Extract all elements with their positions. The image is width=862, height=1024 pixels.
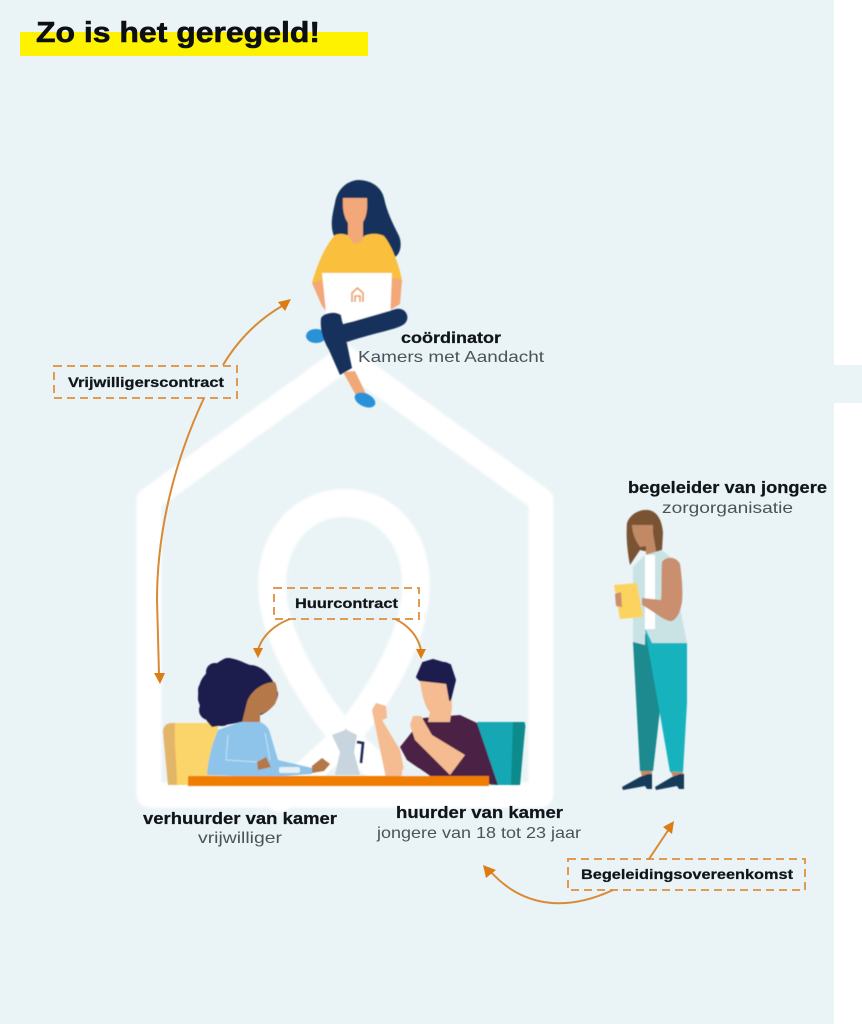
hair xyxy=(417,660,455,700)
illustration: landlord and tenant at table xyxy=(163,658,525,786)
laptop xyxy=(322,273,392,322)
pants xyxy=(633,629,687,772)
contract label: Huurcontract: Huurcontract xyxy=(295,595,398,611)
hair xyxy=(332,180,401,257)
label: landlord: vrijwilliger xyxy=(198,830,283,847)
label: tenant: huurder van kamer xyxy=(396,803,563,822)
arrow: to landlord xyxy=(154,398,204,684)
label: counsellor xyxy=(628,478,827,517)
contract label: Begeleidingsovereenkomst xyxy=(568,859,805,890)
neck and face xyxy=(343,198,367,246)
title: Zo is het geregeld! xyxy=(36,17,320,49)
title xyxy=(20,17,368,56)
blue top xyxy=(207,722,312,777)
ankles xyxy=(640,768,683,777)
label: counsellor: begeleider van jongere xyxy=(628,478,827,497)
hands xyxy=(257,757,330,773)
contract label: Vrijwilligerscontract xyxy=(54,366,237,398)
clipboard xyxy=(614,583,643,619)
illustration: counsellor xyxy=(614,510,687,790)
arrow: to coordinator xyxy=(223,299,291,365)
contract label: Huurcontract xyxy=(274,588,419,619)
cup xyxy=(279,767,300,773)
arrow: to tenant from rental contract xyxy=(395,619,426,659)
label: coordinator: coördinator xyxy=(401,330,501,347)
coffee pot xyxy=(332,728,363,775)
hair xyxy=(198,658,278,727)
label: tenant xyxy=(376,803,582,842)
face and neck xyxy=(242,682,277,724)
label: landlord xyxy=(143,809,337,847)
sweater xyxy=(312,234,402,300)
shirt xyxy=(645,555,655,629)
back shoe xyxy=(306,329,326,343)
contract label: Vrijwilligerscontract: Vrijwilligerscontract xyxy=(68,374,224,390)
label: landlord: verhuurder van kamer xyxy=(143,809,337,828)
shoes xyxy=(622,774,684,790)
shirt xyxy=(400,715,498,785)
arms xyxy=(312,278,402,312)
arrow: to counsellor xyxy=(649,821,674,859)
illustration: coordinator with laptop xyxy=(306,180,407,411)
cup xyxy=(402,769,432,777)
landlord xyxy=(198,658,330,777)
teal chair xyxy=(477,722,525,785)
arm and hands xyxy=(615,558,682,621)
raised arm xyxy=(372,703,405,778)
lower leg and front shoe xyxy=(343,371,378,411)
face and neck xyxy=(632,525,657,556)
label: coordinator xyxy=(358,330,545,366)
legs xyxy=(321,309,407,375)
label: counsellor: zorgorganisatie xyxy=(662,500,793,517)
top seam xyxy=(226,733,270,762)
contract label: Begeleidingsovereenkomst: Begeleidingsovereenkomst xyxy=(581,866,793,882)
house and ribbon outline xyxy=(149,358,541,798)
hair xyxy=(627,510,663,565)
forearm xyxy=(410,716,465,775)
label: coordinator: Kamers met Aandacht xyxy=(358,349,545,366)
arrow: to landlord from rental contract xyxy=(253,619,290,658)
vest xyxy=(633,550,687,645)
neck and face xyxy=(420,677,452,722)
arrow: to tenant from guidance agreement xyxy=(483,865,613,903)
table xyxy=(188,776,489,786)
label: tenant: jongere van 18 tot 23 jaar xyxy=(376,825,582,842)
yellow chair xyxy=(163,723,218,785)
tenant xyxy=(372,660,498,785)
